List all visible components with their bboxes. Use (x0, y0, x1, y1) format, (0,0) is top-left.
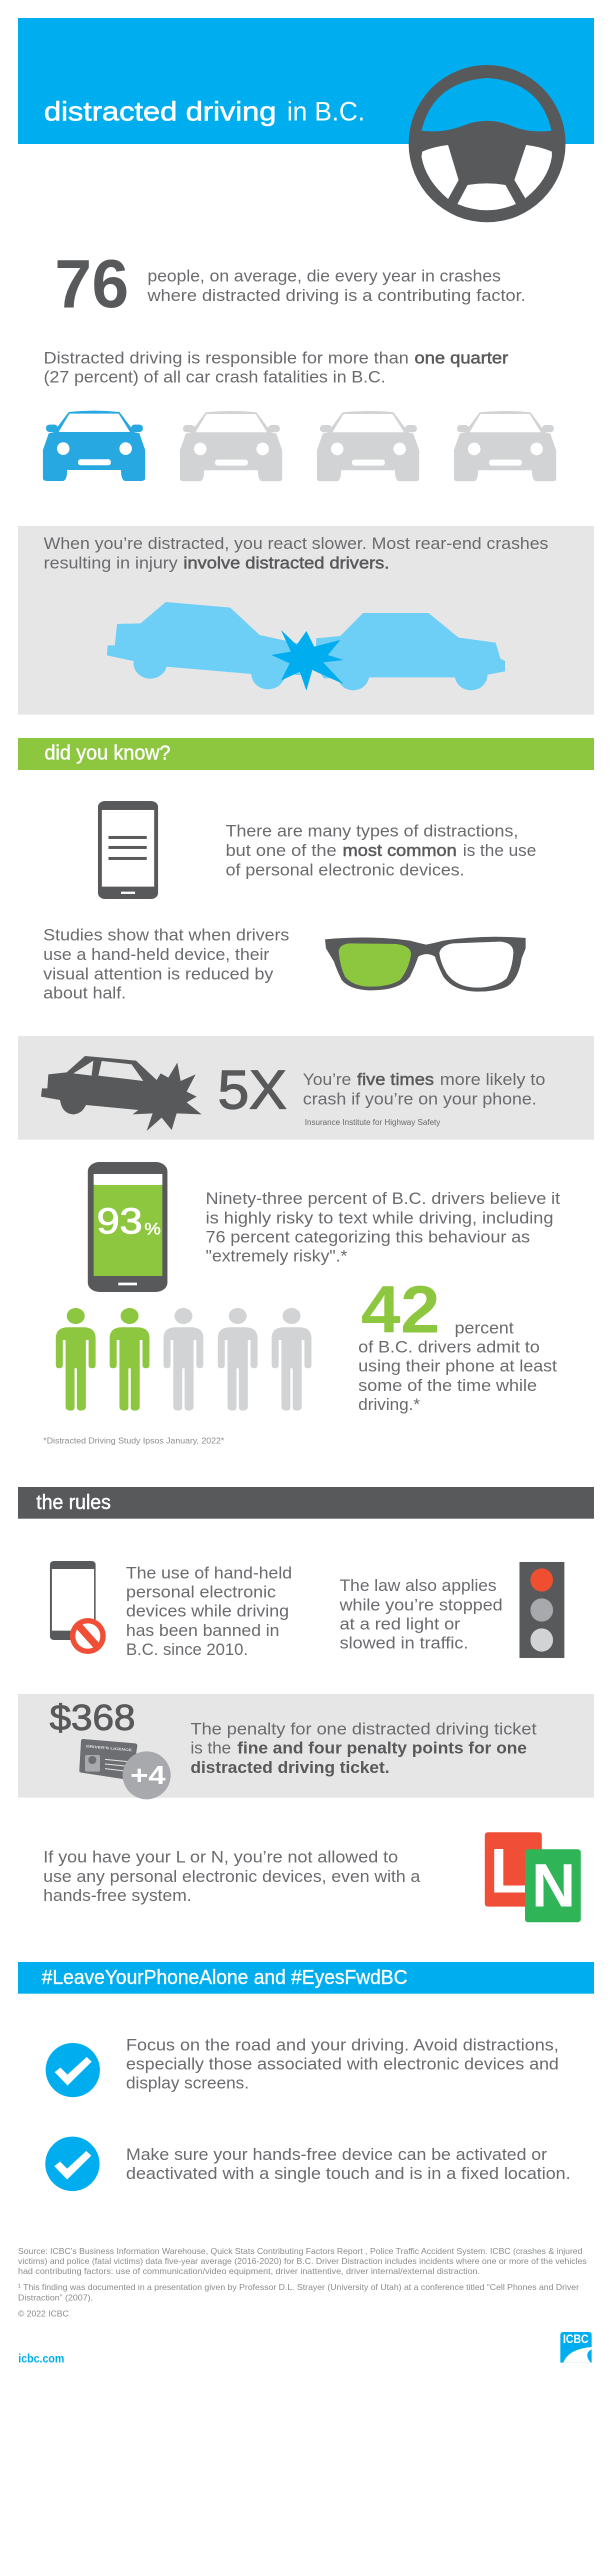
text: red light law: slowed in traffic. (340, 1633, 468, 1652)
text: 93 percent believe: "extremely risky".* (206, 1247, 348, 1266)
icon: blue car (43, 411, 145, 481)
text: 93 percent believe: 76 percent categorizing this behaviour as (206, 1227, 530, 1246)
panel: rear-end crashes (18, 526, 594, 715)
text: react slower: When you’re distracted, you react slower. Most rear-end crashes (44, 534, 548, 553)
icon: two cars colliding (107, 602, 505, 691)
title: in B.C. (287, 97, 365, 127)
icon row: people (56, 1308, 311, 1411)
text: hand-held ban: B.C. since 2010. (126, 1640, 248, 1659)
text: most common distraction: There are many types of distractions, (226, 822, 518, 841)
text: one quarter of fatalities: (27 percent) of all car crash fatalities in B.C. (44, 368, 386, 387)
panel: penalty (18, 1694, 594, 1799)
text: visual attention: about half. (43, 983, 126, 1002)
statistic: 76 people: 76 (55, 245, 129, 322)
text: focus: especially those associated with electronic devices and (126, 2054, 559, 2073)
icon: licence plus four points: DRIVER'S LICENCE (86, 1744, 133, 1752)
tip 1: focus on the road (46, 2035, 559, 2097)
icon: L and N signs: L (490, 1836, 528, 1906)
statistic: fine amount: $368 (50, 1697, 135, 1738)
logo: ICBC (560, 2332, 592, 2363)
footnote: study: *Distracted Driving Study Ipsos January, 2022* (43, 1436, 225, 1446)
statistic: 5X: 5X (218, 1059, 287, 1121)
heading: the rules (18, 1487, 594, 1519)
text: hands-free: deactivated with a single touch and is in a fixed location. (126, 2164, 571, 2183)
icon row: cars one in four (43, 411, 556, 481)
text: more likely to crash: crash if you’re on your phone. (303, 1089, 537, 1108)
text: L or N drivers (43, 1848, 421, 1905)
icon: person grey 5 (272, 1308, 311, 1411)
text: hand-held ban: The use of hand-held (126, 1563, 292, 1582)
text: focus: display screens. (126, 2074, 249, 2093)
text: most common distraction (226, 822, 536, 879)
text: visual attention (43, 926, 289, 1002)
source notes: ¹ This finding was documented in a presentation given by Professor D.L. Strayer (University of Utah) at a conference titled “Cell Phones and Driver (18, 2282, 579, 2292)
icon: grey car 3 (317, 411, 419, 481)
icon: grey car 2 (180, 411, 282, 481)
icon: check mark 2 (45, 2137, 100, 2191)
text: red light law: at a red light or (340, 1614, 461, 1633)
text: most common distraction: but one of the (226, 841, 337, 860)
icon: smartphone (98, 801, 158, 899)
logo: ICBC: ICBC (563, 2332, 589, 2346)
icon: phone showing 93 percent: % (144, 1220, 161, 1238)
text: react slower: resulting in injury (44, 553, 178, 572)
statistic: 42 percent: using their phone at least (358, 1357, 557, 1376)
title (44, 97, 365, 127)
tip 2: hands-free device (45, 2137, 571, 2191)
text: visual attention: visual attention is reduced by (43, 964, 274, 983)
icon: traffic light (519, 1562, 564, 1658)
text: 93 percent believe: is highly risky to text while driving, including (206, 1208, 553, 1227)
text: hand-held ban: devices while driving (126, 1602, 289, 1621)
text: 93 percent believe: Ninety-three percent of B.C. drivers believe it (206, 1189, 560, 1208)
text: L or N drivers: hands-free system. (43, 1886, 192, 1905)
source notes: victims) and police (fatal victims) data five-year average (2016-2020) for B.C. Driver Distraction includes incidents where one or more of the vehicles (18, 2256, 587, 2266)
icon: person grey 4 (218, 1308, 258, 1411)
text: L or N drivers: use any personal electronic devices, even with a (43, 1867, 421, 1886)
heading: the rules: the rules (36, 1492, 111, 1514)
icon: person green 2 (110, 1308, 149, 1411)
heading: hashtags (18, 1962, 594, 1994)
icon: licence plus four points (79, 1739, 171, 1799)
source notes: had contributing factors: use of communication/video equipment, driver inattentive, driver internal/external distraction. (18, 2266, 480, 2276)
text: penalty: distracted driving ticket. (190, 1758, 390, 1777)
text: most common distraction: is the use (463, 841, 536, 860)
text: hands-free (126, 2145, 571, 2183)
statistic: 42 percent: 42 (361, 1273, 440, 1348)
link: icbc.com: icbc.com (18, 2354, 64, 2366)
text: one quarter of fatalities: Distracted driving is responsible for more than (44, 348, 409, 367)
icon: phone showing 93 percent (88, 1162, 167, 1292)
text: visual attention: Studies show that when drivers (43, 926, 289, 945)
icon: phone with prohibited sign (50, 1561, 106, 1654)
text: one quarter of fatalities: one quarter (414, 348, 509, 367)
statistic: 76 people: where distracted driving is a contributing factor. (146, 286, 526, 305)
text: one quarter of fatalities (44, 348, 509, 387)
icon: person grey 3 (164, 1308, 203, 1411)
text: L or N drivers: If you have your L or N, you’re not allowed to (43, 1848, 398, 1867)
statistic: 42 percent: driving.* (358, 1395, 420, 1414)
text: hand-held ban: has been banned in (126, 1621, 279, 1640)
text: 93 percent believe (206, 1189, 560, 1266)
text: penalty: The penalty for one distracted driving ticket (190, 1719, 537, 1738)
source notes: Source: ICBC’s Business Information Warehouse, Quick Stats Contributing Factors Report , Police Traffic Accident System. ICBC (crashes & injured (18, 2246, 583, 2256)
source notes (18, 2246, 587, 2318)
title: distracted driving (44, 97, 276, 127)
icon: phone showing 93 percent: 93 (97, 1200, 142, 1241)
header banner (18, 18, 594, 222)
text: react slower: involve distracted drivers. (183, 553, 389, 572)
icon: licence plus four points: +4 (130, 1760, 166, 1790)
icon: steering wheel (409, 65, 566, 222)
statistic: 76 people: people, on average, die every year in crashes (148, 266, 501, 286)
icon: car crash (41, 1056, 202, 1131)
statistic: 76 people (55, 245, 526, 322)
text: red light law: The law also applies (340, 1576, 497, 1595)
statistic: 42 percent: of B.C. drivers admit to (358, 1338, 540, 1357)
text: penalty (190, 1719, 537, 1777)
heading: did you know: did you know? (44, 742, 170, 764)
text: hand-held ban: personal electronic (126, 1583, 277, 1602)
text: most common distraction: most common (343, 841, 457, 860)
text: red light law (339, 1576, 503, 1652)
source notes: Distraction” (2007). (18, 2292, 93, 2302)
statistic: 42 percent: percent (455, 1318, 514, 1337)
source notes: © 2022 ICBC (18, 2308, 69, 2318)
text: hand-held ban (126, 1563, 292, 1659)
statistic: 42 percent (358, 1273, 557, 1414)
text: penalty: is the (190, 1739, 231, 1758)
text: more likely to crash: You’re (303, 1070, 351, 1089)
text: hands-free: Make sure your hands-free device can be activated or (126, 2145, 547, 2164)
text: focus: Focus on the road and your driving. Avoid distractions, (126, 2035, 559, 2054)
icon: grey car 4 (454, 411, 556, 481)
text: more likely to crash: more likely to (440, 1070, 545, 1089)
statistic: 42 percent: some of the time while (358, 1376, 537, 1395)
text: more likely to crash: five times (357, 1070, 434, 1089)
icon: glasses (325, 937, 526, 992)
icon: L and N signs: N (532, 1852, 576, 1920)
text: penalty: fine and four penalty points for one (237, 1739, 527, 1758)
icon: check mark 1 (46, 2043, 100, 2097)
text: react slower (44, 534, 548, 572)
text: more likely to crash: Insurance Institute for Highway Safety (305, 1118, 440, 1127)
icon: person green 1 (56, 1308, 96, 1411)
text: focus (126, 2035, 559, 2093)
text: red light law: while you’re stopped (339, 1595, 503, 1614)
text: visual attention: use a hand-held device, their (43, 945, 270, 964)
text: most common distraction: of personal electronic devices. (226, 860, 465, 879)
heading: did you know (18, 738, 594, 770)
icon: L and N signs (485, 1832, 581, 1922)
panel: five times (18, 1036, 594, 1140)
heading: hashtags: #LeaveYourPhoneAlone and #EyesFwdBC (42, 1967, 408, 1989)
text: more likely to crash (303, 1070, 545, 1127)
